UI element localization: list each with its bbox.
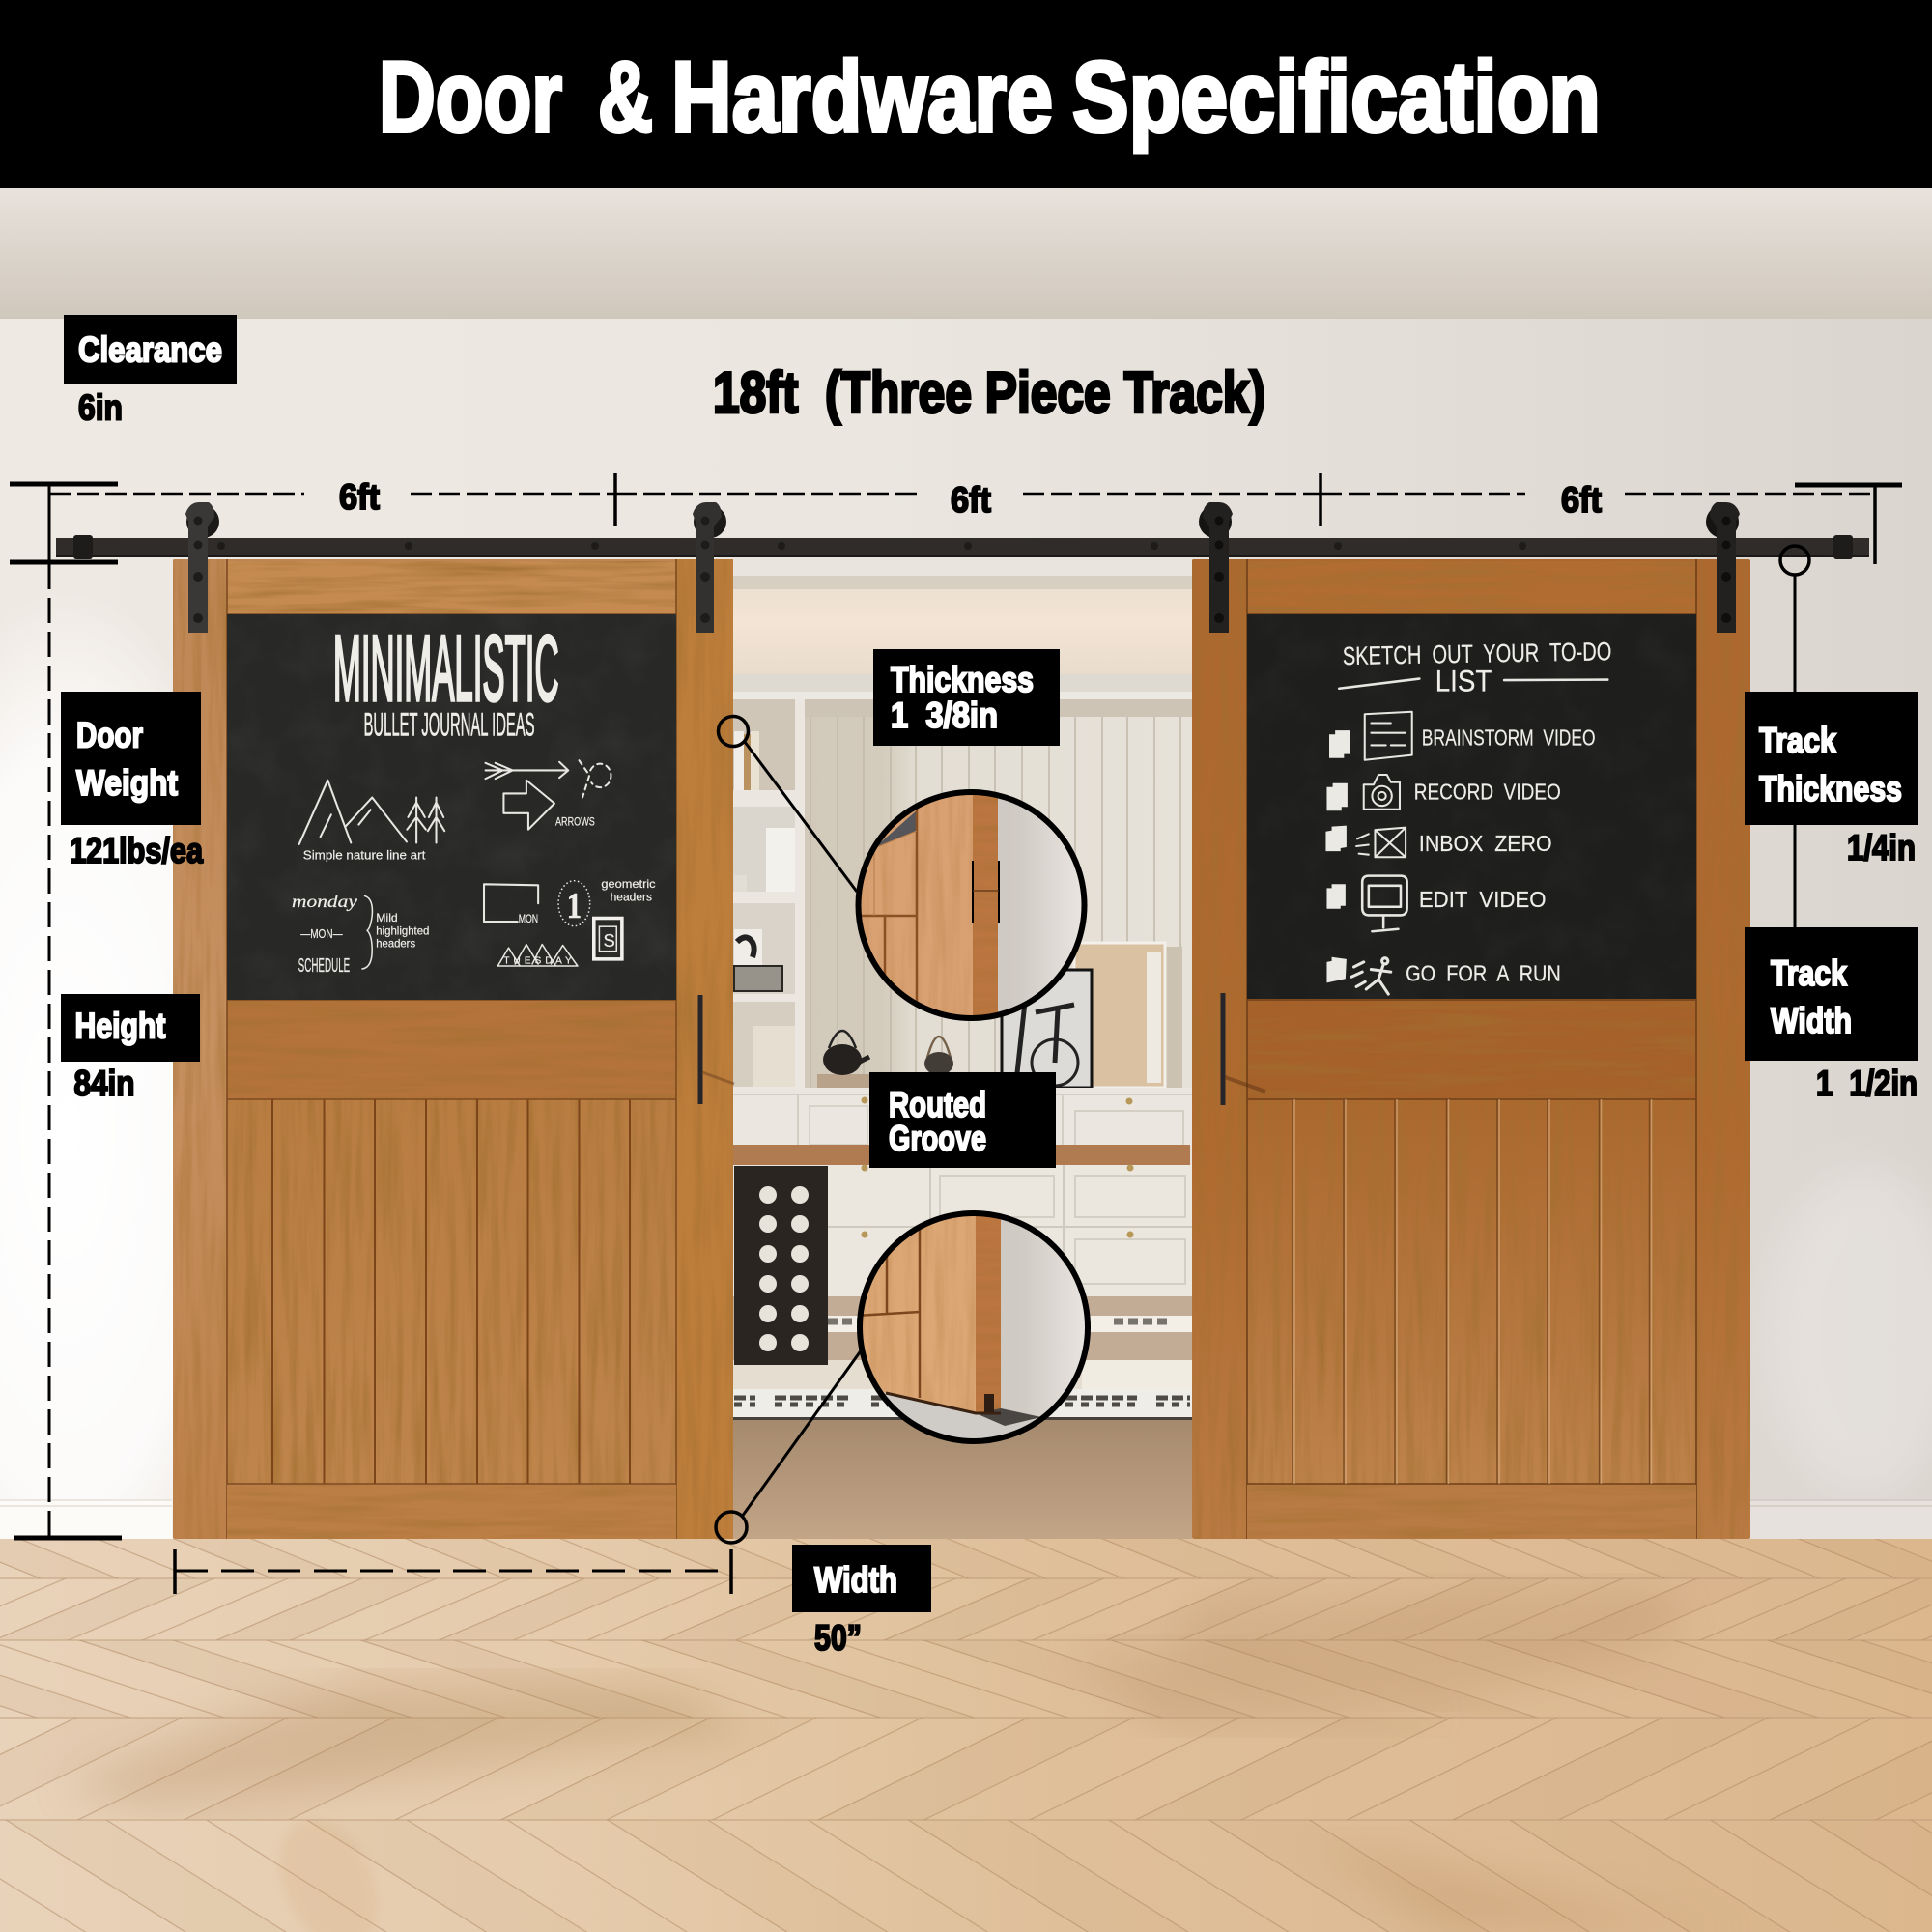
door body <box>1192 559 1750 1539</box>
title: Specification <box>1072 42 1601 154</box>
wall and ceiling background <box>0 188 1932 1671</box>
top rail <box>1247 561 1696 614</box>
track hanger 4 <box>1706 502 1740 633</box>
magnified inset: routed groove <box>855 1208 1096 1449</box>
panel: left chalkboard: MON <box>519 912 538 925</box>
door body <box>173 559 733 1539</box>
panel: left chalkboard: Simple nature line art <box>303 847 426 862</box>
height callout: Height <box>75 1007 166 1045</box>
panel: left chalkboard: highlighted <box>376 924 429 937</box>
height callout <box>61 994 200 1103</box>
door width callout <box>792 1545 931 1658</box>
section label 1: 6ft <box>339 477 380 517</box>
panel: right chalkboard <box>1247 614 1696 999</box>
upper cabinet drawers <box>733 1088 1192 1146</box>
track width callout: Track <box>1771 953 1847 993</box>
middle rail <box>227 1000 676 1099</box>
chalk geometric headers <box>484 884 538 922</box>
room floor and patterned rug <box>733 1296 1192 1539</box>
panel: left chalkboard: MINIMALISTIC <box>333 615 559 721</box>
door width dimension line <box>175 1549 731 1594</box>
perforated black desk panel <box>734 1166 828 1365</box>
vertical planks <box>1247 1099 1696 1484</box>
middle rail <box>1247 1000 1696 1099</box>
door width callout: 50” <box>814 1618 862 1658</box>
panel: left chalkboard: T U E S D A Y <box>503 955 572 966</box>
door weight callout: Weight <box>76 763 178 803</box>
door thickness callout: 1 3/8in <box>891 696 998 735</box>
panel: right barn door <box>1192 559 1750 1539</box>
track hanger 2 <box>693 502 726 633</box>
door thickness callout: Thickness <box>891 660 1034 699</box>
track width callout: Width <box>1771 1001 1852 1040</box>
panel: left chalkboard: Mild <box>376 912 398 924</box>
track hanger 1 <box>185 502 219 633</box>
routed groove callout: Routed <box>889 1085 986 1124</box>
callout leader: thickness <box>719 717 857 892</box>
panelled back wall <box>805 699 1192 1090</box>
title: & <box>598 42 653 154</box>
chalk icons <box>1365 712 1412 760</box>
panel: left chalkboard: BULLET JOURNAL IDEAS <box>364 707 535 744</box>
chalk mountains and trees <box>299 781 444 844</box>
clearance callout: Clearance <box>78 330 222 369</box>
chalk heading: SKETCH OUT YOUR TO-DO <box>1343 637 1612 670</box>
title: Door <box>379 42 562 154</box>
door weight callout <box>61 692 203 870</box>
panel: right chalkboard: LIST <box>1435 663 1492 697</box>
routed groove callout: Groove <box>889 1119 986 1158</box>
vertical planks <box>227 1099 676 1484</box>
magnified inset: door thickness <box>850 787 1092 1024</box>
clearance callout <box>64 315 237 427</box>
panel: left chalkboard: headers <box>376 938 415 951</box>
panel: right chalkboard: RECORD VIDEO <box>1414 780 1561 805</box>
shelving alcove <box>733 699 806 1095</box>
door handle <box>1221 993 1265 1105</box>
track thickness callout <box>1745 692 1918 867</box>
callout leader: routed groove <box>716 1350 862 1543</box>
panel: left chalkboard <box>227 614 676 1000</box>
panel: left chalkboard: geometric <box>601 877 656 891</box>
panel: left chalkboard: S <box>603 930 615 951</box>
tea kettles on tray <box>817 1031 955 1088</box>
section label 3: 6ft <box>1561 480 1602 520</box>
checkbox list text: BRAINSTORM VIDEO <box>1422 724 1596 750</box>
height callout: 84in <box>73 1064 135 1103</box>
wooden desktop <box>733 1145 1190 1165</box>
panel: left barn door <box>173 559 734 1539</box>
panel: left chalkboard: ARROWS <box>555 815 595 829</box>
panel: left chalkboard: 1 <box>567 886 582 926</box>
routed groove callout <box>869 1072 1056 1168</box>
leaning art frames <box>1002 943 1182 1088</box>
clearance callout: 6in <box>78 388 123 427</box>
door thickness callout <box>873 649 1060 746</box>
track length dimension lines <box>49 473 1902 564</box>
lower cabinet drawers <box>828 1165 1192 1296</box>
door width callout: Width <box>814 1560 897 1600</box>
panel: left chalkboard: SCHEDULE <box>298 955 350 977</box>
bottom rail <box>1247 1485 1696 1539</box>
sliding track rail <box>56 535 1869 559</box>
section label 2: 6ft <box>951 480 991 520</box>
track hanger 3 <box>1199 502 1233 633</box>
track thickness callout: Thickness <box>1759 769 1902 809</box>
panel: right chalkboard: INBOX ZERO <box>1419 831 1552 856</box>
track thickness callout: Track <box>1759 721 1836 760</box>
panel: left chalkboard: —MON— <box>300 926 343 941</box>
top rail <box>227 561 676 614</box>
chalk headers: monday <box>292 892 358 911</box>
header bar <box>0 0 1932 188</box>
track thickness callout: 1/4in <box>1847 828 1916 867</box>
panel: right chalkboard: GO FOR A RUN <box>1406 960 1561 985</box>
callout leader: track <box>1780 546 1809 927</box>
chalk arrows <box>486 762 568 830</box>
panel: left chalkboard: headers <box>611 891 652 904</box>
track total length label: 18ft (Three Piece Track) <box>713 360 1265 425</box>
title: Hardware <box>671 42 1053 154</box>
door weight callout: Door <box>76 715 143 755</box>
door weight callout: 121lbs/ea <box>70 831 203 870</box>
checkboxes <box>1325 730 1350 982</box>
chevron wood floor <box>0 1539 1932 1932</box>
track width callout <box>1745 927 1918 1103</box>
bottom rail <box>227 1485 676 1539</box>
panel: right chalkboard: EDIT VIDEO <box>1419 887 1547 912</box>
title <box>379 42 1601 154</box>
door handle <box>697 995 734 1104</box>
height dimension line <box>10 484 122 1538</box>
room seen through the doorway <box>733 556 1192 1539</box>
